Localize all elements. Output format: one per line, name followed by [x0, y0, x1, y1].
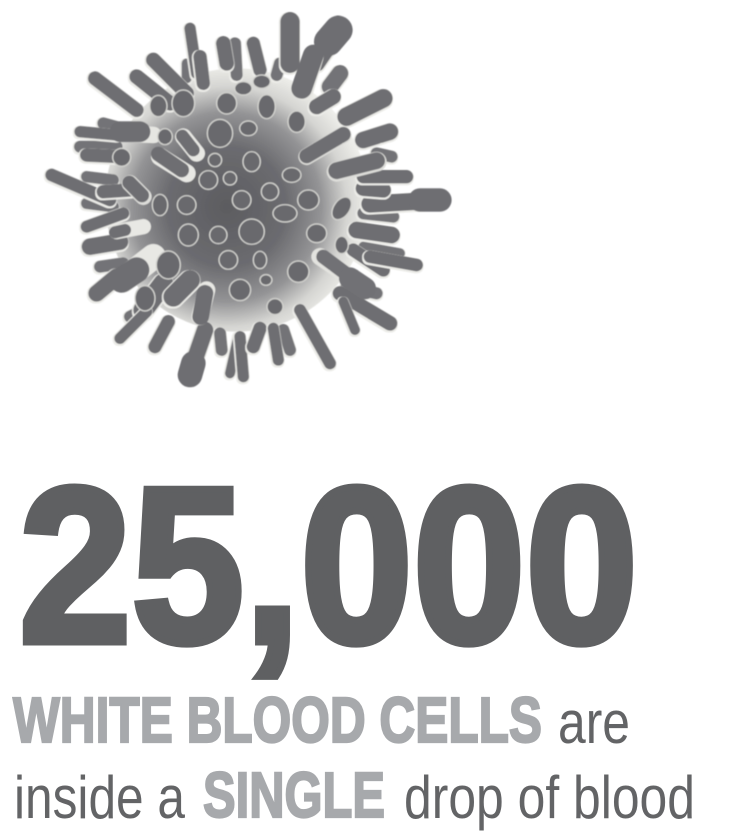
short rim spikes — [80, 43, 400, 350]
club spike heads — [190, 30, 440, 375]
caption line 2: SINGLE — [203, 759, 385, 831]
virus illustration — [52, 22, 440, 377]
caption line 1: WHITE BLOOD CELLS — [13, 684, 542, 756]
long rim spikes — [52, 22, 440, 377]
caption line 2: drop of blood — [404, 764, 695, 831]
virus sphere — [105, 68, 368, 332]
spikes in front of the sphere — [115, 55, 377, 317]
surface bumps — [113, 75, 355, 315]
caption line 1: are — [558, 689, 630, 756]
caption line 2 — [14, 759, 695, 831]
caption line 2: inside a — [14, 764, 186, 831]
big number: 25,000 — [19, 442, 638, 690]
